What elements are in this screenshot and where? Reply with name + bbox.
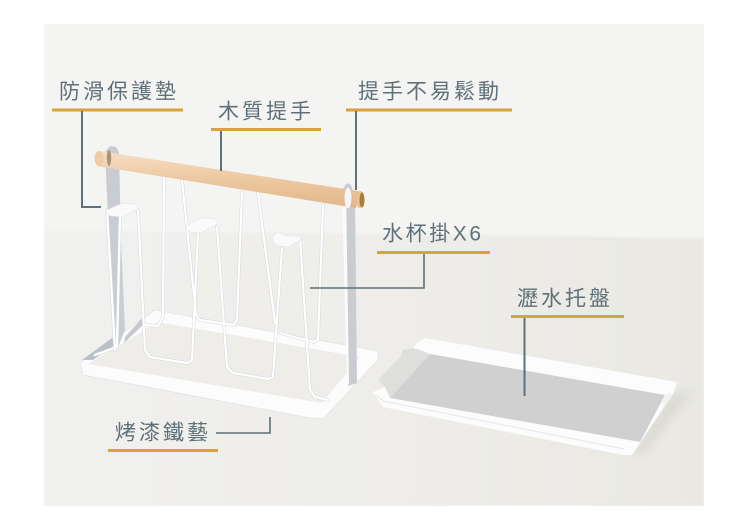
label: six cup hooks: [310, 222, 490, 288]
drip tray: [373, 338, 677, 455]
label: painted iron: 烤漆鐵藝: [115, 422, 211, 444]
tray shadow: [630, 392, 692, 456]
label: painted iron: [108, 417, 270, 452]
label: wooden handle: [211, 100, 321, 171]
drying rack: [80, 146, 378, 419]
right upright frame: [342, 183, 357, 386]
label: drip tray: 瀝水托盤: [517, 288, 613, 310]
non-slip pads: [106, 203, 302, 247]
label: stable handle: [346, 80, 512, 190]
label: six cup hooks: 水杯掛X6: [382, 222, 484, 246]
label: drip tray: [511, 288, 624, 396]
label: wooden handle: 木質提手: [218, 100, 314, 124]
label: stable handle: 提手不易鬆動: [358, 80, 502, 104]
cup hook wires: [95, 176, 328, 400]
label: non-slip pad: 防滑保護墊: [59, 80, 179, 104]
left upright frame: [105, 146, 125, 345]
rack base tray: [80, 310, 378, 419]
label: non-slip pad: [52, 80, 183, 207]
wooden handle: [94, 150, 364, 208]
